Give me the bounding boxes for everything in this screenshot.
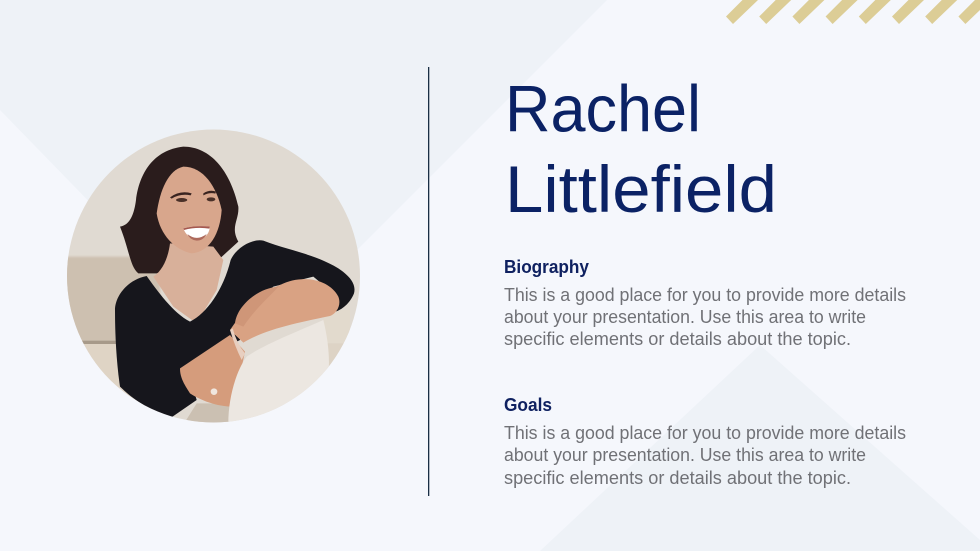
- text block: biography description: [504, 285, 906, 349]
- text block: biography description: about your presentation. Use this area to write: [504, 307, 866, 327]
- decorative gold stripes: [726, 0, 980, 24]
- title: name: Rachel: [505, 72, 701, 146]
- background shape: bottom-right triangle: [540, 345, 980, 551]
- text block: goals description: This is a good place for you to provide more details: [504, 423, 906, 443]
- background shape: top-left diamond: [0, 0, 607, 362]
- heading: biography: Biography: [504, 257, 589, 277]
- text block: goals description: specific elements or details about the topic.: [504, 468, 851, 488]
- text block: goals description: about your presentation. Use this area to write: [504, 445, 866, 465]
- text block: biography description: specific elements or details about the topic.: [504, 329, 851, 349]
- vertical divider line: [428, 67, 429, 496]
- title: name: Littlefield: [505, 152, 777, 226]
- text block: goals description: [504, 423, 906, 488]
- text block: biography description: This is a good place for you to provide more details: [504, 285, 906, 305]
- circular portrait photo: [60, 123, 367, 430]
- title: name: [505, 72, 777, 226]
- heading: goals: Goals: [504, 395, 552, 415]
